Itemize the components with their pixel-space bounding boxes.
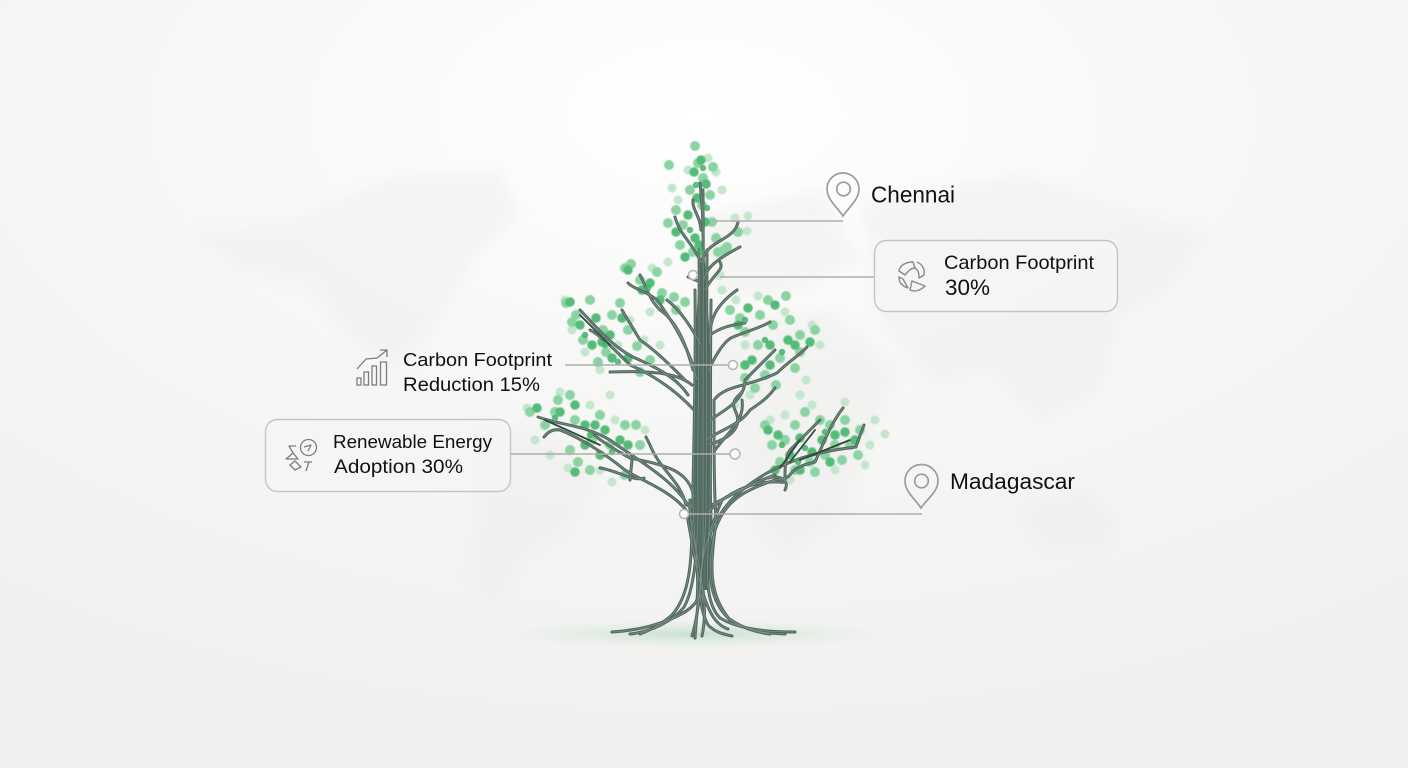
connector lines bbox=[511, 221, 922, 514]
tree leaves back layer bbox=[527, 146, 885, 482]
callout: Chennai bbox=[827, 173, 955, 216]
lower mid right twist bbox=[706, 388, 775, 445]
callout: Carbon Footprint 30% bbox=[874, 240, 1118, 312]
lower left branch bbox=[538, 417, 694, 510]
lower right branch bbox=[708, 408, 864, 540]
tree branches dark strands bbox=[538, 183, 864, 638]
tree branches highlight strands bbox=[538, 183, 864, 638]
icon: recycle bbox=[899, 262, 925, 291]
icon: growth chart bbox=[357, 350, 387, 385]
callout: Renewable Energy Adoption 30% bbox=[266, 420, 510, 492]
icon: renewable cycle bbox=[286, 440, 316, 471]
mid left branch bbox=[580, 310, 694, 410]
label: Chennai: Chennai bbox=[871, 182, 955, 208]
value line: Reduction 15% bbox=[403, 374, 540, 396]
value line: Adoption 30% bbox=[334, 456, 463, 478]
panel bbox=[874, 240, 1118, 312]
label: Carbon Footprint bbox=[403, 349, 552, 370]
upper left branch bbox=[628, 275, 701, 380]
world map silhouette bbox=[190, 170, 1210, 610]
panel bbox=[266, 420, 510, 492]
callout: Madagascar bbox=[905, 464, 1075, 508]
icon: location pin bbox=[905, 464, 938, 508]
value: 30% bbox=[945, 275, 990, 300]
tree leaves front layer bbox=[545, 168, 850, 468]
label: Carbon Footprint bbox=[944, 252, 1095, 274]
mid right branch bbox=[708, 290, 807, 450]
callout: Carbon Footprint Reduction 15% bbox=[357, 349, 552, 396]
trunk and roots bbox=[612, 190, 795, 638]
trunk core bbox=[693, 262, 712, 590]
label: Madagascar: Madagascar bbox=[950, 469, 1075, 494]
icon: location pin bbox=[827, 173, 859, 216]
tree node markers bbox=[680, 270, 740, 518]
label: Renewable Energy bbox=[333, 431, 493, 452]
ground shadow bbox=[490, 619, 900, 649]
tree bbox=[527, 146, 885, 638]
crown bbox=[675, 183, 740, 290]
